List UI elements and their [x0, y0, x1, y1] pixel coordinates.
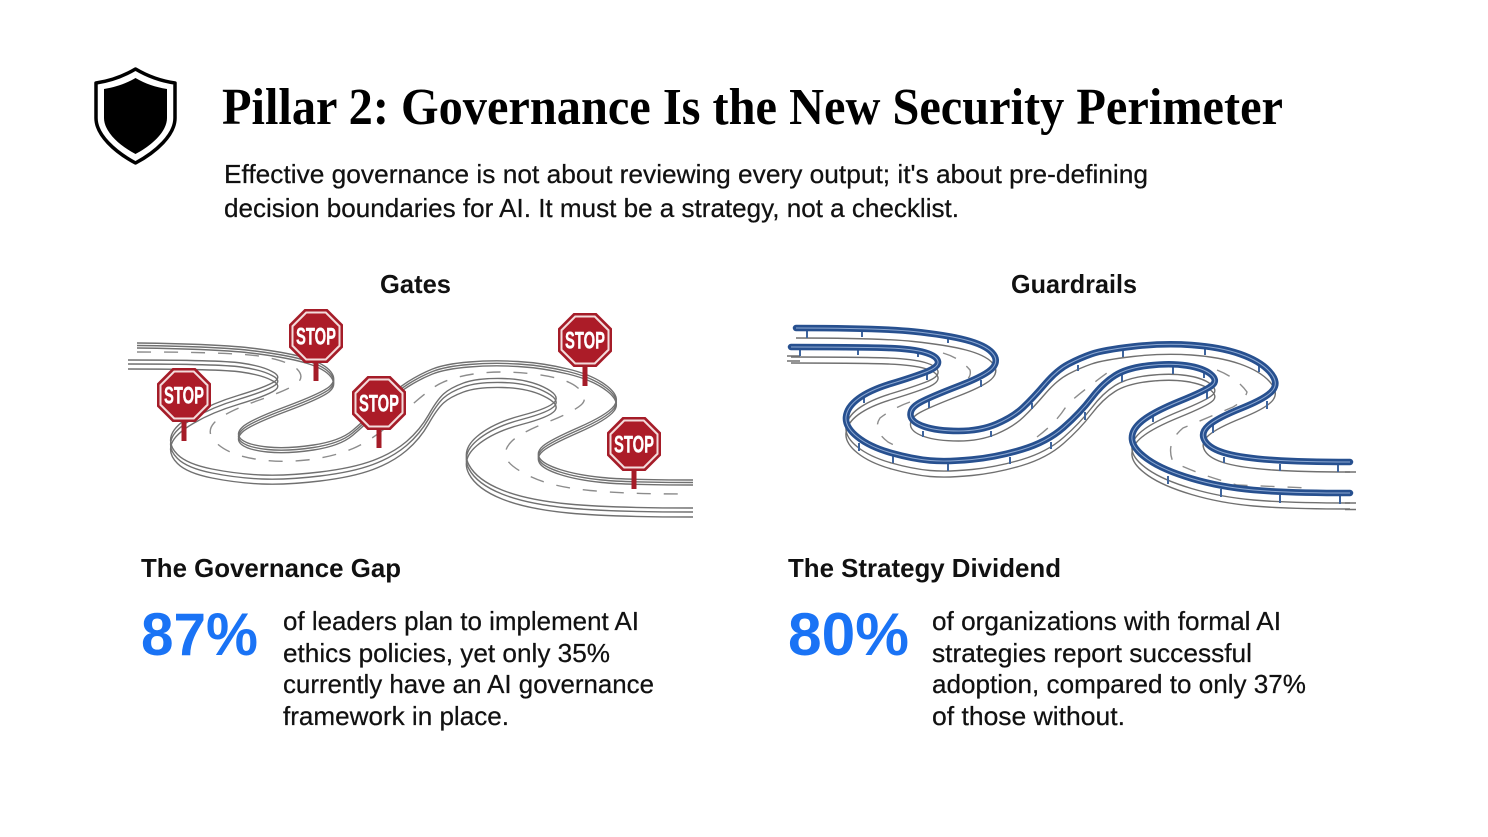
icon: stop sign 5: STOP — [614, 432, 654, 458]
icon: stop sign 2 — [157, 368, 211, 441]
guardrail: upper — [796, 328, 1350, 462]
road edges — [787, 338, 1356, 510]
road edges — [128, 343, 693, 517]
road centre line — [877, 353, 1310, 488]
icon: stop sign 1: STOP — [296, 324, 336, 350]
icon: stop sign 4 — [558, 313, 612, 386]
stat description: strategy dividend: of those without. — [932, 701, 1125, 731]
stat description: governance gap — [283, 606, 654, 731]
icon: stop sign 2: STOP — [164, 382, 204, 410]
stat description: strategy dividend: adoption, compared to only 37% — [932, 669, 1306, 699]
intro text — [224, 159, 1148, 223]
guardrail posts — [800, 331, 1340, 504]
icon: stop sign 3 — [352, 376, 406, 448]
stat description: governance gap: ethics policies, yet only 35% — [283, 638, 610, 668]
stat description: strategy dividend — [932, 606, 1306, 731]
stat description: strategy dividend: of organizations with formal AI — [932, 606, 1281, 636]
intro text: Effective governance is not about reviewing every output; it's about pre-defining — [224, 159, 1148, 189]
heading: guardrails: Guardrails — [1011, 269, 1137, 299]
icon: shield — [96, 69, 175, 163]
icon: stop sign 4: STOP — [565, 328, 605, 354]
stat: 87%: 87% — [141, 601, 258, 668]
heading: the strategy dividend: The Strategy Dividend — [788, 553, 1061, 583]
icon: stop sign 5 — [607, 417, 661, 489]
intro text: decision boundaries for AI. It must be a strategy, not a checklist. — [224, 193, 959, 223]
stat: 80%: 80% — [788, 601, 909, 668]
panel: gates — [128, 269, 693, 731]
illustration: winding road with stop signs — [128, 309, 693, 517]
icon: stop sign 1 — [289, 309, 343, 381]
heading: the governance gap: The Governance Gap — [141, 553, 401, 583]
panel: guardrails — [787, 269, 1356, 731]
road centre line — [137, 352, 685, 494]
heading: gates: Gates — [380, 269, 451, 299]
illustration: winding road with blue guardrails — [787, 328, 1356, 510]
stat description: governance gap: framework in place. — [283, 701, 509, 731]
guardrail: lower — [791, 347, 1350, 493]
stat description: governance gap: currently have an AI governance — [283, 669, 654, 699]
icon: stop sign 3: STOP — [359, 390, 399, 418]
title: Pillar 2: Governance Is the New Security Perimeter — [222, 79, 1283, 136]
stat description: strategy dividend: strategies report successful — [932, 638, 1252, 668]
stat description: governance gap: of leaders plan to implement AI — [283, 606, 639, 636]
